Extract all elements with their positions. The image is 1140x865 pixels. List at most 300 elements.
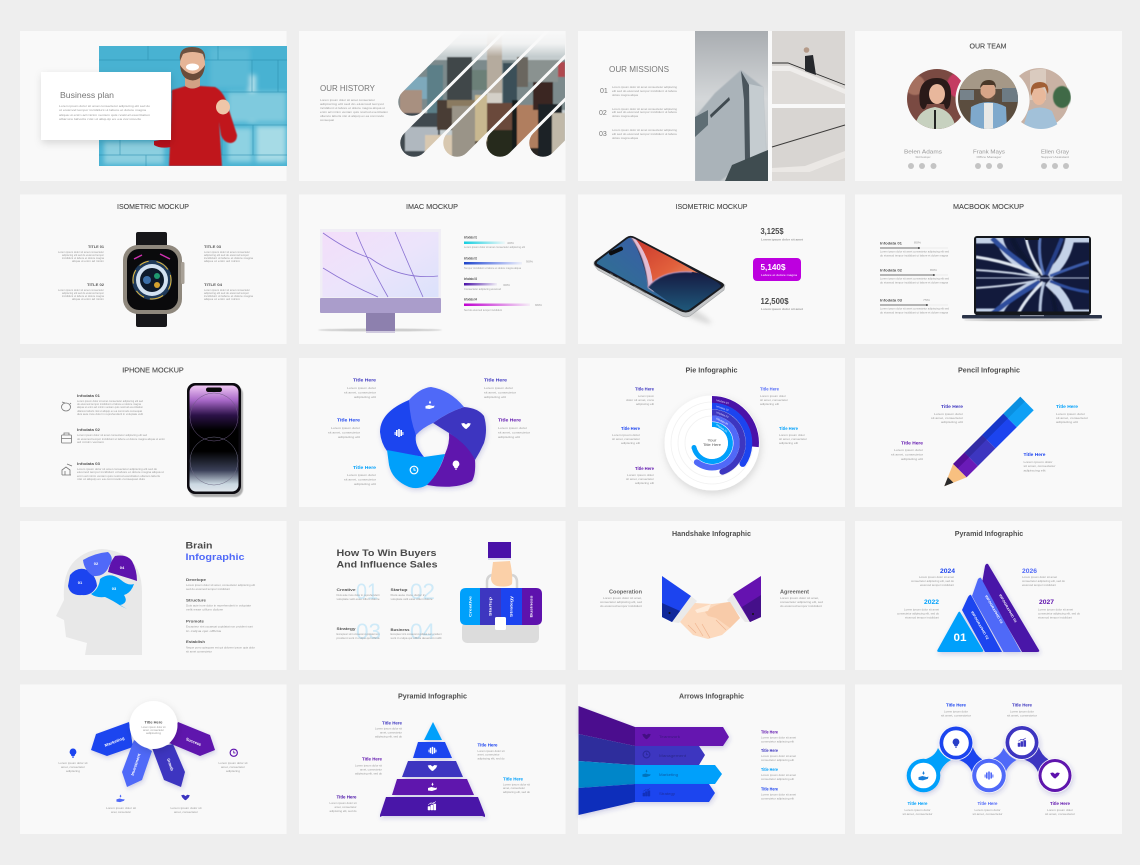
info block 01	[77, 394, 143, 416]
callout: bottom middle: Lorem ipsum dolor	[974, 808, 1001, 812]
portrait: Belen Adams	[907, 69, 961, 129]
five petal diagram	[380, 387, 486, 488]
watch title 02: incididunt ut labore et dolore magna	[62, 294, 104, 298]
bar: infodata 03: 30%	[503, 283, 510, 287]
callout: bottom left: Lorem ipsum dolor	[904, 808, 931, 812]
callout: second right: Title Here	[478, 742, 498, 748]
callout: third: Title Here	[761, 767, 779, 772]
callout: middle right: Lorem ipsum dolor	[779, 433, 805, 437]
mission 02	[599, 107, 677, 118]
callout: lower right: adipiscing elit	[1024, 468, 1046, 472]
heading: how to win buyers: How To Win Buyers	[336, 548, 436, 559]
metric: infodata 03: do eiusmod tempor incididunt ut labore et dolore magna	[880, 310, 948, 314]
photo: man on stairs	[772, 31, 845, 104]
item: establish: Establish	[186, 640, 205, 644]
radial bar chart: Infodata 03	[716, 410, 730, 419]
callout: bottom left: adipiscing elit, sed do	[330, 809, 357, 813]
mission 02: dolore magna aliqua	[612, 114, 638, 118]
radial bar chart: Infodata 05	[715, 423, 729, 434]
callout: second right: Lorem ipsum dolor sit	[478, 749, 505, 753]
member: Ellen Gray	[1041, 150, 1069, 169]
callout: 2026: Lorem ipsum dolor sit amet	[1022, 575, 1057, 579]
blade: success	[169, 722, 215, 756]
head silhouette	[56, 549, 142, 655]
callout: agreement: Lorem ipsum dolor sit amet,	[780, 596, 819, 600]
mission 03: Lorem ipsum dolor sit amet consectetur adipiscing	[612, 128, 677, 132]
heading: imac mockup: IMAC MOCKUP	[406, 202, 458, 211]
callout: bottom left	[344, 465, 377, 486]
heading: handshake infographic: Handshake Infographic	[672, 529, 751, 538]
center circle: Title Here	[144, 720, 163, 724]
watch title 04: aliqua ut enim ad minim	[204, 297, 241, 301]
callout: second right: adipiscing elit, sed do	[478, 756, 505, 760]
caption bottom left: amet, consectetur	[111, 810, 131, 814]
center circle: adipiscing	[146, 731, 161, 735]
callout: middle right: Title Here	[779, 426, 799, 431]
brain lobe 02: 02	[94, 561, 99, 566]
callout: lower left	[891, 440, 924, 461]
heading: iphone mockup: IPHONE MOCKUP	[122, 366, 184, 374]
briefcase illustration: Startup	[488, 596, 492, 616]
info block 01: ullamco laboris nisi ut aliquip ex ea commodo consequat	[77, 409, 142, 413]
watch title 01: Lorem ipsum dolor sit amet consectetur	[58, 250, 104, 254]
callout: 2022: consectetur adipiscing elit, sed do	[897, 612, 939, 616]
callout: lower left: sit amet, consectetur	[891, 452, 923, 456]
arrow band: cyan	[578, 761, 722, 788]
item: creative: Duis aute irure dolor in reprehenderit	[336, 593, 380, 597]
callout: top left: sit amet, consectetur	[941, 714, 971, 718]
callout: upper left: sit amet, consectetur	[931, 416, 963, 420]
callout: top: adipiscing elit, sed do	[375, 734, 402, 738]
pyramid labels: INFOGRAPHIC 03	[984, 594, 1004, 624]
icon: hand	[426, 400, 434, 409]
brain lobe 04	[108, 556, 137, 581]
info block 01: Lorem ipsum dolor sit amet consectetur adipiscing elit sed	[77, 399, 143, 403]
highlighted stat: 5,140$: 5,140$	[760, 263, 786, 272]
item: develope: Lorem ipsum dolor sit amet, consectetur adipiscing elit	[186, 583, 255, 587]
fan diagram	[91, 722, 215, 787]
bar: infodata 02: Tempor incididunt ut labore et dolore magna aliqua	[464, 266, 521, 270]
watch title 04: adipiscing elit sed do eiusmod tempor	[204, 291, 249, 295]
info block 03: eiusmod tempor incididunt ut labore et dolore magna aliqua ut	[77, 470, 164, 474]
item: strategy: proident sunt in culpa qui officia	[336, 636, 380, 640]
caption bottom left	[106, 806, 136, 814]
item: creative	[336, 579, 380, 604]
callout: upper left: Title Here	[635, 386, 655, 392]
callout: upper right	[1056, 404, 1088, 424]
watch title 03: adipiscing elit sed do eiusmod tempor	[204, 253, 249, 257]
watch title 02	[58, 283, 104, 301]
panel: brain infographic	[20, 521, 286, 670]
item: creative: voluptate velit esse cillum dolore	[336, 597, 380, 601]
center circle: Lorem ipsum dolor sit	[142, 725, 166, 729]
info block 02: Infodata 02	[77, 428, 100, 432]
photo: city skyline in diagonal pills	[398, 38, 565, 157]
callout: third left	[355, 756, 383, 776]
callout: fourth	[761, 786, 796, 800]
panel: arrows infographic	[578, 684, 845, 834]
mission 03	[599, 128, 677, 140]
callout: agreement	[780, 590, 823, 608]
stat: 3,125$	[760, 227, 803, 242]
callout: top right: sit amet, consectetur	[1007, 714, 1037, 718]
callout: middle left: Title Here	[621, 426, 641, 431]
callout: bottom left: Title Here	[908, 801, 928, 806]
panel: our team	[855, 31, 1122, 181]
caption right: Lorem ipsum dolor sit	[218, 761, 248, 765]
pyramid labels: INFOGRAPHIC 02	[970, 610, 990, 640]
callout: top right: Lorem ipsum dolor	[484, 386, 513, 390]
callout: second: Lorem ipsum dolor sit amet	[761, 754, 796, 758]
bar: infodata 03: Infodata 03	[464, 277, 477, 281]
callout: top left: adipiscing elit	[354, 395, 376, 399]
petal: indigo right	[433, 407, 486, 460]
info block 03: nisi ut aliquip ex ea commodo consequat duis	[77, 477, 146, 481]
item: structure: Structure	[186, 598, 206, 602]
item: develope: Develope	[186, 578, 206, 582]
callout: second: consectetur adipiscing elit	[761, 758, 794, 762]
callout: upper left: dolor sit amet, cons	[626, 398, 655, 402]
bar: infodata 04: Infodata 04	[464, 298, 477, 302]
stat: 12,500$: Lorem ipsum dolor sit amet	[761, 307, 803, 311]
callout: 2024: eiusmod tempor incididunt	[920, 583, 954, 587]
callout: top: Title Here	[382, 720, 403, 726]
mission 01: dolore magna aliqua	[612, 93, 638, 97]
callout: upper left	[931, 404, 964, 424]
briefcase illustration: Creative	[468, 595, 472, 617]
item: structure: Duis aute irure dolor in reprehenderit in voluptate	[186, 604, 251, 608]
callout: fourth right: amet, consectetur	[503, 786, 525, 790]
item: structure	[186, 598, 251, 612]
blade labels: Investment	[130, 752, 142, 776]
connected rings diagram	[907, 725, 1072, 793]
callout: lower left: sit amet, consectetur	[626, 477, 654, 481]
panel: watch mockup	[20, 194, 286, 344]
arrow labels	[642, 734, 687, 796]
callout: top left: Lorem ipsum dolor	[944, 710, 968, 714]
metric: infodata 01	[880, 240, 949, 258]
blade labels	[104, 735, 203, 776]
icon: bar chart house	[62, 464, 72, 475]
callout: lower right: Title Here	[1024, 452, 1046, 457]
blade labels: Marketing	[104, 735, 126, 748]
item: promote	[186, 620, 253, 633]
item: business: Excepteur sint occaecat cupidatat non proident	[390, 632, 442, 636]
metric: infodata 03	[880, 298, 949, 314]
heading: pencil infographic: Pencil Infographic	[958, 366, 1020, 374]
callout: 2024: Lorem ipsum dolor sit amet	[919, 575, 954, 579]
member: Frank Mays: Office Manager	[976, 155, 1002, 159]
item: strategy	[336, 619, 381, 644]
bar: infodata 02: 90%	[526, 260, 533, 264]
panel: connected rings infographic	[855, 684, 1122, 834]
callout: 2026: 2026	[1022, 568, 1037, 575]
radial bar chart: Infodata 04	[716, 416, 729, 426]
info block 02	[77, 428, 165, 444]
callout: 2024: 2024	[940, 568, 955, 575]
arrow band: purple	[578, 706, 729, 746]
caption bottom right: amet, consectetur	[174, 810, 198, 814]
callout: lower left: adipiscing elit	[635, 481, 654, 485]
callout: second right	[478, 742, 505, 760]
watch title 03: incididunt ut labore et dolore magna	[204, 256, 253, 260]
callout: bottom left	[902, 801, 932, 816]
item: strategy: 03	[356, 619, 381, 644]
text block	[320, 98, 388, 122]
heading: how to win buyers	[336, 548, 438, 570]
info block 02: do eiusmod tempor incididunt ut labore et dolore magna aliqua ut enim	[77, 437, 165, 441]
callout: upper left: Title Here	[941, 404, 964, 409]
callout: bottom left: adipiscing elit	[354, 482, 376, 486]
iphone mockup	[187, 383, 243, 497]
portrait: Ellen Gray	[1019, 68, 1071, 131]
bar: infodata 04	[464, 298, 542, 312]
callout: lower left: adipiscing elit	[901, 457, 923, 461]
callout: 2022	[897, 599, 939, 620]
callout: 2026: eiusmod tempor incididunt	[1022, 583, 1056, 587]
item: business: sunt in culpa qui officia deserunt mollit	[390, 636, 442, 640]
watch title 04: TITLE 04	[204, 283, 222, 287]
icon: handshake	[181, 795, 190, 800]
icon: bulb	[70, 748, 76, 758]
info block 01: Infodata 01	[77, 394, 100, 398]
callout: agreement: do eiusmod tempor incididunt	[780, 604, 822, 608]
callout: top left	[941, 702, 971, 718]
callout: upper right: Lorem ipsum dolor	[1056, 412, 1085, 416]
callout: cooperation: Lorem ipsum dolor sit amet,	[603, 596, 642, 600]
heading: isometric mockup: ISOMETRIC MOCKUP	[117, 202, 189, 211]
white title card	[41, 72, 171, 140]
caption right	[218, 761, 248, 773]
watch mockup	[123, 232, 184, 327]
blade: marketing	[91, 722, 133, 756]
watch title 01: aliqua ut enim ad minim	[72, 259, 104, 263]
callout: second right: amet, consectetur	[478, 752, 500, 756]
stat: 3,125$: 3,125$	[760, 227, 784, 236]
bar: infodata 03: Consectetur adipiscing eiusmod	[464, 287, 501, 291]
callout: second: Title Here	[761, 748, 779, 753]
caption bottom right: Lorem ipsum dolor sit	[170, 806, 202, 810]
info block 02: Lorem ipsum dolor sit amet consectetur adipiscing elit sed	[77, 433, 147, 437]
caption bottom right	[170, 806, 202, 814]
watch title 02: adipiscing elit sed do eiusmod tempor	[62, 291, 104, 295]
caption bottom left: Lorem ipsum dolor sit	[106, 806, 136, 810]
metric: infodata 02	[880, 268, 949, 284]
callout: middle left: Title Here	[337, 418, 361, 422]
panel: macbook mockup	[855, 194, 1122, 344]
callout: cooperation: Cooperation	[609, 590, 642, 596]
stepped pyramid	[380, 722, 485, 817]
photo: concrete stairs	[772, 108, 845, 181]
watch title 02: aliqua ut enim ad minim	[72, 297, 104, 301]
petal: blue left	[380, 400, 424, 457]
callout: top left: Title Here	[353, 378, 377, 382]
arrow labels: Teamwork	[659, 734, 680, 739]
callout: upper right: Title Here	[1056, 404, 1079, 409]
metric: infodata 01: 80%	[914, 240, 921, 244]
pencil illustration	[938, 397, 1034, 493]
mission 01: Lorem ipsum dolor sit amet consectetur adipiscing	[612, 85, 677, 89]
watch title 03	[204, 245, 253, 263]
isometric phone	[594, 236, 726, 324]
arrow labels: Marketing	[659, 772, 678, 777]
callout: 2026	[1022, 568, 1065, 587]
panel: pyramid infographic 1	[855, 521, 1122, 670]
text block: Lorem ipsum dolor sit amet consectetur	[320, 98, 375, 102]
item: promote: Promote	[186, 620, 204, 624]
heading: pyramid infographic: Pyramid Infographic	[398, 692, 467, 700]
callout: middle left: adipiscing elit	[621, 441, 640, 445]
callout: top left	[344, 378, 377, 399]
info block 01: aliqua ut enim ad minim veniam quis nostrud exercitation	[77, 405, 143, 409]
callout: top: amet, consectetur	[380, 730, 402, 734]
callout: bottom left: sit amet, consectetur	[902, 812, 932, 816]
callout: bottom left: Lorem ipsum dolor	[347, 473, 376, 477]
callout: bottom right: sit amet, consectetur	[1045, 812, 1075, 816]
panel: five petal infographic	[299, 358, 566, 507]
callout: middle right: adipiscing elit	[779, 441, 798, 445]
imac mockup	[318, 229, 442, 333]
info block 03	[77, 462, 164, 481]
callout: bottom left: Lorem ipsum dolor sit	[330, 801, 357, 805]
metric: infodata 03: Lorem ipsum dolor sit amet consectetur adipiscing elit sed	[880, 306, 949, 310]
portrait: Frank Mays	[956, 69, 1018, 129]
heading: isometric mockup: ISOMETRIC MOCKUP	[676, 202, 748, 211]
mission 03: elit sed do eiusmod tempor incididunt ut labore	[612, 132, 677, 136]
callout: upper right: adipiscing elit	[1056, 420, 1078, 424]
stat: 12,500$	[760, 297, 803, 311]
callout: 2022: eiusmod tempor incididunt	[905, 616, 939, 620]
callout: lower left: Title Here	[635, 466, 655, 471]
arrow band: indigo	[578, 734, 705, 765]
highlighted stat: 5,140$: Labore et dolore magna	[761, 273, 797, 277]
item: startup: voluptate velit esse cillum dolore	[390, 597, 433, 601]
callout: 2026: consectetur adipiscing elit, sed do	[1022, 579, 1065, 583]
mission 01: 01	[600, 88, 608, 95]
icon: people	[395, 429, 403, 437]
item: strategy: Excepteur sint occaecat cupidatat non	[336, 632, 380, 636]
icon: handshake	[428, 765, 437, 771]
callout: bottom left: sit amet, consectetur	[344, 478, 376, 482]
callout: third: Lorem ipsum dolor sit amet	[761, 773, 796, 777]
panel: pyramid infographic 2	[299, 684, 566, 834]
blade labels: Growth	[166, 758, 175, 772]
watch title 04	[204, 283, 253, 301]
metric: infodata 02: Infodata 02	[880, 268, 902, 272]
callout: bottom left: amet, consectetur	[334, 805, 356, 809]
callout: middle left: sit amet, consectetur	[328, 430, 360, 434]
stat: 12,500$: 12,500$	[760, 297, 789, 306]
callout: upper right: Lorem ipsum dolor	[760, 394, 786, 398]
heading: arrows infographic: Arrows Infographic	[679, 692, 744, 700]
callout: middle left: Lorem ipsum dolor	[612, 433, 640, 437]
text block: adipiscing elit sed do eiusmod tempor	[320, 102, 384, 106]
info block 03: Lorem ipsum dolor sit amet consectetur adipiscing elit sed do	[77, 467, 157, 471]
arrow band: blue	[578, 784, 715, 815]
brain lobe 01	[68, 569, 97, 595]
watch title 01	[58, 245, 104, 263]
callout: middle right: adipiscing elit	[498, 435, 520, 439]
callout: middle right	[498, 418, 530, 439]
item: business	[390, 619, 442, 644]
callout: lower left	[626, 466, 655, 485]
bar: infodata 03	[464, 277, 510, 291]
member: Belen Adams	[904, 150, 942, 169]
member: Ellen Gray: Support Assistant	[1041, 155, 1069, 159]
icon: clock	[410, 466, 418, 474]
blade: investment	[122, 740, 152, 787]
callout: lower left: Lorem ipsum dolor	[627, 473, 654, 477]
layered pyramid diagram	[937, 564, 1039, 652]
watch title 03: aliqua ut enim ad minim	[204, 259, 241, 263]
bar: infodata 04: 96%	[535, 303, 542, 307]
callout: middle right: sit amet, consectetur	[779, 437, 807, 441]
brain lobe 03	[91, 575, 134, 609]
panel: pie infographic	[578, 358, 845, 507]
blade labels: Success	[185, 736, 203, 747]
item: promote: in culpa qui officia	[186, 629, 221, 633]
caption left: Lorem ipsum dolor sit	[58, 761, 88, 765]
callout: 2022: 2022	[924, 599, 939, 606]
callout: bottom middle: sit amet, consectetur	[972, 812, 1002, 816]
panel: fan infographic	[20, 684, 286, 834]
bar: infodata 01: 40%	[507, 241, 514, 245]
callout: upper left: adipiscing elit	[636, 402, 654, 406]
callout: 2027: consectetur adipiscing elit, sed do	[1038, 612, 1080, 616]
stat: 3,125$: Lorem ipsum dolor sit amet	[761, 238, 803, 242]
callout: upper right: sit amet, consectetur	[760, 398, 788, 402]
callout: lower right: sit amet, consectetur	[1024, 464, 1056, 468]
callout: second	[761, 748, 796, 762]
callout: bottom right: Title Here	[1050, 801, 1071, 806]
arrow labels: Strategy	[659, 791, 675, 796]
watch title 03: Lorem ipsum dolor sit amet consectetur	[204, 250, 250, 254]
member: Belen Adams: Belen Adams	[904, 150, 942, 156]
icon: clock	[230, 749, 237, 756]
panel: imac mockup	[299, 194, 566, 344]
callout: top right: Lorem ipsum dolor	[1010, 710, 1034, 714]
callout: cooperation: consectetur adipiscing elit, sed	[600, 600, 642, 604]
caption left	[58, 761, 88, 773]
metric: infodata 02: do eiusmod tempor incididunt ut labore et dolore magna	[880, 280, 948, 284]
bar: infodata 02	[464, 256, 533, 270]
item: develope	[186, 578, 255, 591]
radial bar chart: Your	[708, 438, 718, 442]
radial bar chart: Infodata 01	[716, 398, 730, 405]
panel: our missions	[578, 31, 845, 181]
callout: first: Title Here	[761, 730, 779, 734]
panel: pencil infographic	[855, 358, 1122, 507]
brain lobe 01: 01	[78, 580, 83, 585]
bar: infodata 01: Lorem ipsum dolor sit amet consectetur adipiscing elit	[464, 245, 525, 249]
text block: incididunt ut labore et dolore magna aliqua ut	[320, 106, 385, 110]
callout: fourth right: Lorem ipsum dolor sit	[503, 782, 530, 786]
callout: bottom right	[1045, 801, 1075, 816]
text block: consequat	[320, 118, 334, 122]
caption right: amet, consectetur	[221, 765, 245, 769]
blade: growth	[152, 744, 185, 787]
item: establish: sit amet consectetur	[186, 650, 212, 654]
icon: handshake	[461, 423, 471, 429]
mission 03: dolore magna aliqua	[612, 136, 638, 140]
item: startup: Startup	[390, 588, 409, 592]
callout: top right: adipiscing elit	[484, 395, 506, 399]
icon: briefcase	[62, 433, 72, 443]
info block 03: Infodata 03	[77, 462, 100, 466]
callout: upper right: sit amet, consectetur	[1056, 416, 1088, 420]
callout: bottom left	[330, 794, 357, 813]
callout: upper left: Lorem ipsum	[638, 394, 654, 398]
